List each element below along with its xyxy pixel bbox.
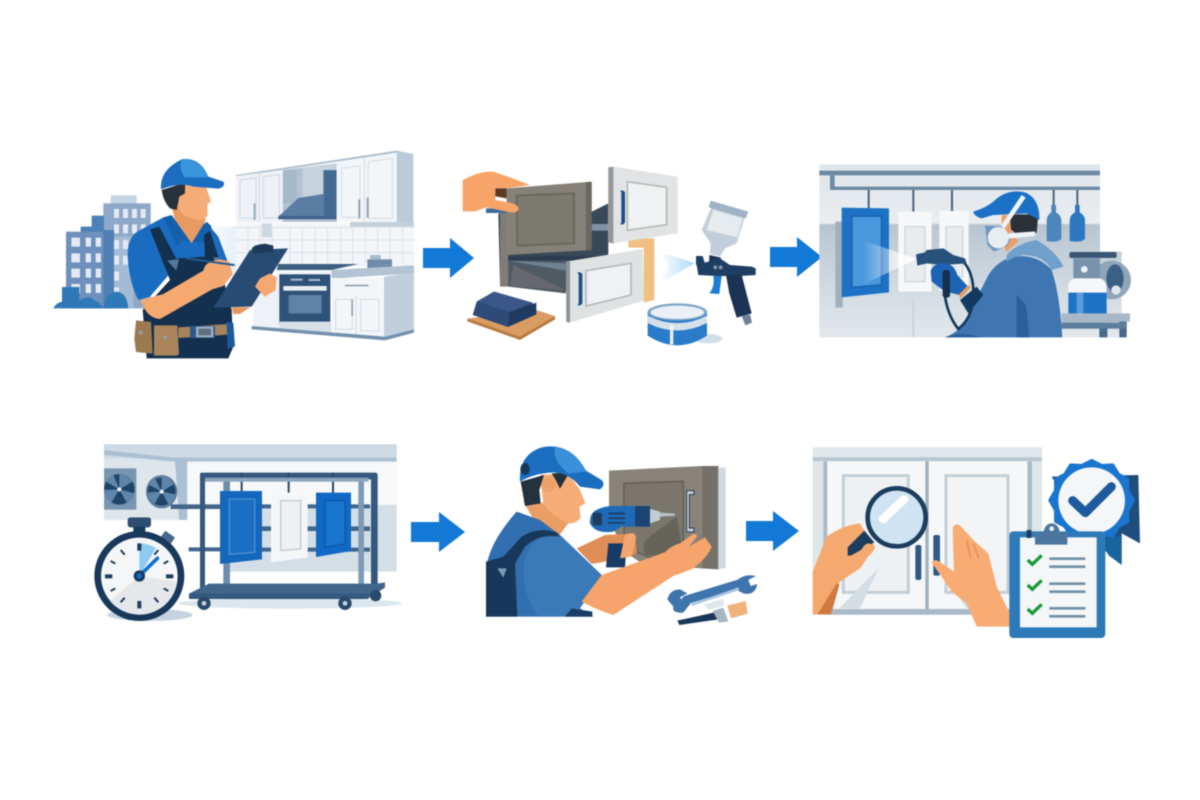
arrow: step 5 to step 6 bbox=[746, 511, 799, 551]
drying rack on wheels bbox=[171, 473, 385, 610]
panel: step 3 spraying bbox=[819, 164, 1131, 337]
drill bbox=[590, 506, 650, 532]
hanging white door bbox=[271, 494, 308, 562]
grip fingers bbox=[620, 533, 636, 558]
illustration: grey door held by hand bbox=[507, 182, 592, 255]
far arm bbox=[577, 533, 637, 564]
icon: paint can bbox=[648, 303, 722, 345]
panel: step 2 cabinet prep bbox=[463, 167, 756, 345]
icon: clipboard checklist bbox=[1009, 523, 1105, 638]
respirator bbox=[985, 226, 1012, 252]
hair bbox=[521, 473, 569, 506]
spray fan bbox=[863, 241, 917, 284]
worker shirt bbox=[486, 512, 602, 617]
illustration: inspector with clipboard bbox=[128, 159, 288, 358]
illustration: right hand on handle bbox=[932, 524, 1011, 627]
panel: step 6 quality inspection bbox=[813, 447, 1140, 638]
overall strap and bib bbox=[486, 530, 559, 617]
arrow: step 2 to step 3 bbox=[770, 237, 822, 277]
blue door being sprayed bbox=[842, 208, 889, 297]
side panel of wood bbox=[628, 238, 654, 303]
near hand bbox=[663, 533, 712, 575]
illustration: worker with drill bbox=[486, 446, 712, 617]
icon: stopwatch bbox=[94, 517, 193, 621]
icon: ribbon badge with check bbox=[1050, 461, 1140, 565]
panel: step 1 site inspection bbox=[53, 151, 414, 358]
worker in hoodie bbox=[945, 191, 1063, 337]
near forearm bbox=[582, 552, 680, 615]
face bbox=[540, 473, 585, 523]
worker shirt bbox=[128, 217, 227, 300]
arrow: step 4 to step 5 bbox=[411, 512, 465, 552]
illustration: open cabinet carcass bbox=[498, 203, 654, 303]
white doors on rack bbox=[898, 211, 969, 292]
arrow: step 1 to step 2 bbox=[423, 238, 474, 278]
worker collar bbox=[163, 215, 212, 247]
paint pot and compressor bbox=[1062, 252, 1131, 337]
rack base bbox=[189, 582, 385, 598]
panel: step 4 drying bbox=[94, 444, 402, 621]
neck and skin bbox=[1002, 215, 1018, 252]
panel: step 5 hardware install bbox=[486, 446, 757, 625]
glow behind worker bbox=[207, 227, 237, 277]
hair bbox=[1010, 214, 1038, 236]
illustration: white door upper bbox=[608, 167, 678, 243]
illustration: white cabinet doors bbox=[813, 447, 1042, 615]
writing hand bbox=[203, 259, 233, 290]
hanging blue door left bbox=[220, 491, 262, 564]
cap bbox=[520, 446, 603, 489]
illustration: white door lower bbox=[566, 249, 644, 323]
icon: hand gripping door bbox=[463, 172, 530, 213]
hanging spray bottles bbox=[1047, 205, 1085, 242]
illustration: left hand with magnifier bbox=[813, 488, 926, 614]
icon: sanding block on board bbox=[467, 292, 555, 340]
hoodie hood bbox=[1007, 240, 1063, 270]
spray booth background bbox=[819, 164, 1122, 337]
illustration: kitchen bbox=[236, 151, 414, 340]
worker neck bbox=[171, 203, 206, 243]
hoodie body bbox=[945, 256, 1062, 337]
illustration: grey cabinet door bbox=[609, 466, 726, 569]
pen bbox=[185, 257, 235, 266]
spray mist bbox=[660, 252, 695, 283]
spray gun with gloved hand bbox=[916, 248, 973, 329]
wall fans bbox=[104, 468, 177, 510]
icon: spray gun bbox=[696, 201, 756, 325]
cap bbox=[973, 191, 1039, 220]
drying room background bbox=[104, 444, 402, 609]
worker bib overalls bbox=[143, 227, 233, 358]
icon: blue cap bbox=[161, 159, 224, 189]
neck bbox=[523, 502, 568, 537]
worker hair bbox=[162, 183, 185, 210]
worker face bbox=[175, 181, 211, 220]
hanging blue door right bbox=[316, 493, 351, 557]
icon: wrench and paint brush bbox=[667, 575, 757, 625]
worker forearm bbox=[141, 267, 223, 319]
icon: city buildings bbox=[53, 195, 151, 308]
drill grip bbox=[606, 543, 627, 567]
holding hand bbox=[255, 273, 277, 297]
tool belt bbox=[178, 324, 228, 338]
clipboard bbox=[213, 248, 288, 308]
